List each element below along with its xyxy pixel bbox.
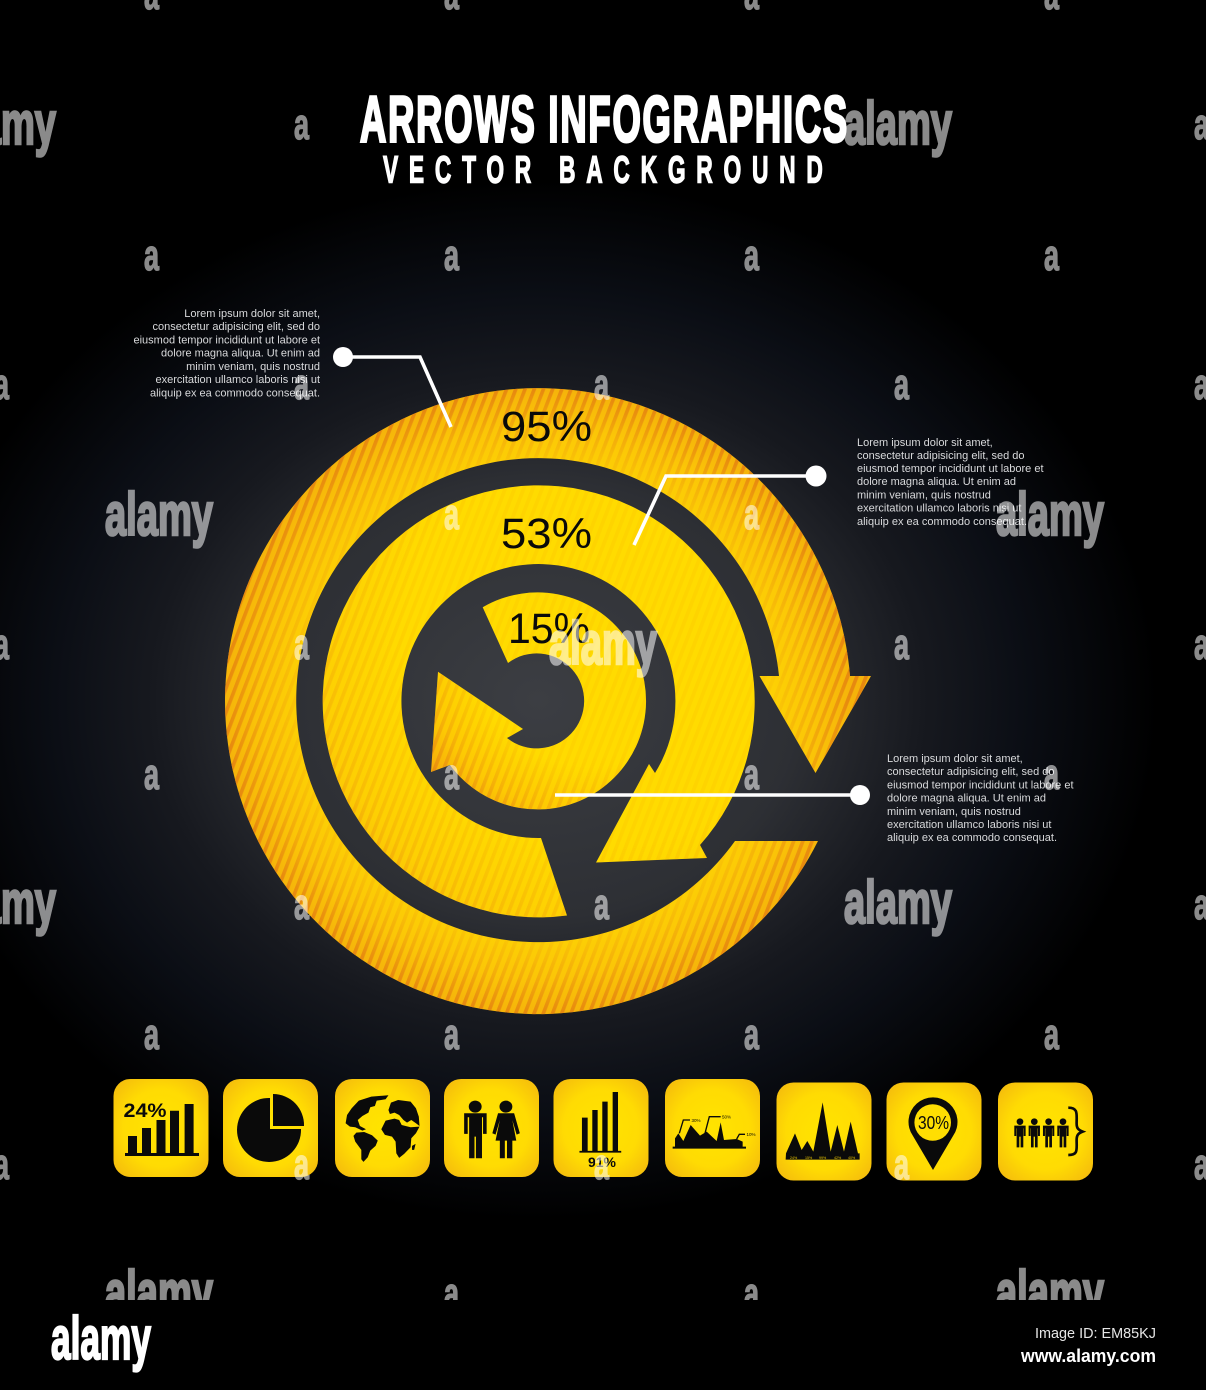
stock watermarks: a <box>894 1140 909 1189</box>
chart: concentric arrows <box>225 388 871 1014</box>
icon: bar chart 91% <box>554 1079 648 1177</box>
stock watermarks: a <box>1044 231 1059 280</box>
icon: map pin 30%: 30% <box>918 1113 949 1133</box>
stock watermarks: alamy <box>105 481 213 548</box>
stock logo: alamy <box>51 1305 151 1372</box>
callout lower right connector <box>555 785 870 805</box>
text block lower right: Lorem ipsum dolor sit amet, <box>887 753 1023 765</box>
icon: world globe <box>335 1079 430 1177</box>
text block lower right: minim veniam, quis nostrud <box>887 806 1021 818</box>
text block right: minim veniam, quis nostrud <box>857 490 991 502</box>
stock watermarks: a <box>594 360 609 409</box>
icon: area chart with callouts: 50% <box>722 1114 731 1120</box>
callout left connector <box>333 347 451 427</box>
stock watermarks: a <box>744 490 759 539</box>
stock watermarks: alamy <box>105 1259 213 1326</box>
stock watermarks: alamy <box>844 90 952 157</box>
stock watermarks: a <box>744 1269 759 1318</box>
text block right: dolore magna aliqua. Ut enim ad <box>857 476 1016 488</box>
text block right: Lorem ipsum dolor sit amet, <box>857 437 993 449</box>
text block left: Lorem ipsum dolor sit amet, <box>184 308 320 320</box>
stock watermarks: alamy <box>996 1259 1104 1326</box>
stock watermarks: a <box>594 1140 609 1189</box>
stock watermarks: a <box>294 1140 309 1189</box>
title: ARROWS INFOGRAPHICS <box>360 84 847 156</box>
stock watermarks: a <box>894 620 909 669</box>
inner arrow 15% <box>431 592 646 809</box>
stock watermarks: alamy <box>549 610 657 677</box>
text block right: exercitation ullamco laboris nisi ut <box>857 502 1021 514</box>
stock watermarks: a <box>1044 1010 1059 1059</box>
text block lower right: eiusmod tempor incididunt ut labore et <box>887 780 1074 792</box>
icon: area chart with callouts: 10% <box>746 1132 756 1137</box>
icon: peaks chart: 24% <box>790 1156 798 1160</box>
icon: bar chart 24% <box>114 1079 208 1177</box>
icon: pie chart <box>223 1079 318 1177</box>
stock watermarks: a <box>144 750 159 799</box>
text block left <box>134 308 320 400</box>
outer arrow 95% <box>225 388 871 1014</box>
icon: area chart with callouts <box>665 1079 760 1177</box>
text block left: eiusmod tempor incididunt ut labore et <box>134 334 320 346</box>
text block right: aliquip ex ea commodo consequat. <box>857 516 1027 528</box>
stock watermarks: a <box>444 750 459 799</box>
stock watermarks: a <box>594 880 609 929</box>
stock watermarks: a <box>294 360 309 409</box>
icon: peaks chart: 15% <box>805 1156 813 1160</box>
stock watermarks: alamy <box>844 869 952 936</box>
icon: peaks chart <box>776 1082 872 1180</box>
stock watermarks: a <box>894 360 909 409</box>
text block left: aliquip ex ea commodo consequat. <box>150 388 320 400</box>
text block right <box>857 437 1044 528</box>
stock watermarks: a <box>294 620 309 669</box>
text block lower right: aliquip ex ea commodo consequat. <box>887 832 1057 844</box>
bottom stock bar <box>0 1300 1206 1390</box>
stock watermarks: alamy <box>996 481 1104 548</box>
stock watermarks: a <box>1044 750 1059 799</box>
text block left: minim veniam, quis nostrud <box>186 361 320 373</box>
label 15%: 15% <box>508 605 590 653</box>
middle arrow 53% <box>323 485 755 917</box>
image id: Image ID: EM85KJ <box>1035 1325 1156 1342</box>
stock watermarks: a <box>444 1269 459 1318</box>
text block left: consectetur adipisicing elit, sed do <box>152 321 320 333</box>
stock watermarks: a <box>444 490 459 539</box>
stock watermarks: a <box>444 231 459 280</box>
icon: area chart with callouts: 30% <box>692 1118 701 1123</box>
icon: peaks chart: 99% <box>819 1156 827 1160</box>
callout right connector <box>634 466 826 545</box>
icon: map pin 30% <box>886 1082 982 1180</box>
icon: man and woman <box>444 1079 539 1177</box>
icon: peaks chart: 42% <box>834 1156 842 1160</box>
text block lower right: dolore magna aliqua. Ut enim ad <box>887 792 1046 804</box>
stock watermarks: a <box>744 231 759 280</box>
text block lower right: consectetur adipisicing elit, sed do <box>887 766 1055 778</box>
subtitle: VECTOR BACKGROUND <box>383 149 823 191</box>
icon: group of people with brace <box>998 1082 1093 1180</box>
stock watermarks: a <box>144 1010 159 1059</box>
text block right: consectetur adipisicing elit, sed do <box>857 450 1025 462</box>
stock watermarks: a <box>294 880 309 929</box>
icon: peaks chart: 40% <box>848 1156 856 1160</box>
stock watermarks: a <box>744 750 759 799</box>
website: www.alamy.com <box>1020 1346 1156 1366</box>
text block lower right <box>887 753 1074 844</box>
stock watermarks: a <box>744 1010 759 1059</box>
text block left: dolore magna aliqua. Ut enim ad <box>161 348 320 360</box>
stock watermarks: a <box>144 231 159 280</box>
text block lower right: exercitation ullamco laboris nisi ut <box>887 819 1051 831</box>
text block left: exercitation ullamco laboris nisi ut <box>156 374 320 386</box>
stock watermarks: a <box>444 1010 459 1059</box>
label 53%: 53% <box>501 510 592 558</box>
icon: bar chart 91%: 91% <box>588 1155 616 1170</box>
label 95%: 95% <box>501 403 592 451</box>
text block right: eiusmod tempor incididunt ut labore et <box>857 463 1044 475</box>
stock watermarks: a <box>294 100 309 149</box>
icon: bar chart 24%: 24% <box>124 1101 167 1122</box>
